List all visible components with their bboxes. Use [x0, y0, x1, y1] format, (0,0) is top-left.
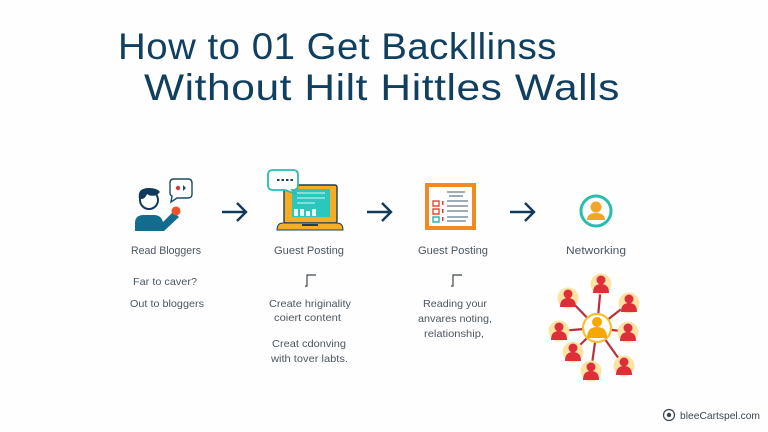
arrow 1: [222, 203, 246, 221]
arrow 2: [367, 203, 391, 221]
icon: laptop with chat bubble: [268, 170, 343, 230]
text block: column 2: [269, 298, 352, 365]
label: Guest Posting second: Guest Posting: [418, 245, 488, 257]
icon: step marker 2: [451, 275, 462, 286]
text block: column 1: Far to caver?: [133, 276, 197, 288]
text block: column 2: coiert content: [274, 312, 341, 324]
text block: column 3: anvares noting,: [418, 313, 492, 325]
label: Networking: Networking: [566, 245, 626, 257]
text block: column 3: Reading your: [423, 298, 488, 310]
text block: column 2: Create hriginality: [269, 298, 352, 310]
icon: checklist document: [427, 185, 474, 228]
icon: person with speech bubble: [135, 179, 192, 231]
text block: column 3: relationship,: [424, 328, 484, 340]
label: Guest Posting: Guest Posting: [274, 245, 344, 257]
icon: networking person badge: [581, 196, 611, 226]
label: Read Bloggers: Read Bloggers: [131, 245, 202, 257]
text block: column 3: [418, 298, 492, 340]
text block: column 2: Creat cdonving: [272, 338, 346, 350]
title: How to 01 Get Backllinss: [118, 26, 557, 67]
network diagram: [548, 274, 640, 382]
text block: column 2: with tover labts.: [270, 353, 348, 365]
arrow 3: [510, 203, 534, 221]
text block: column 1: Out to bloggers: [130, 298, 204, 310]
title: [118, 26, 620, 108]
text block: column 1: [130, 276, 204, 310]
watermark: bleeCartspel.com: [680, 410, 760, 422]
icon: step marker 1: [305, 275, 316, 286]
title: Without Hilt Hittles Walls: [144, 67, 620, 108]
